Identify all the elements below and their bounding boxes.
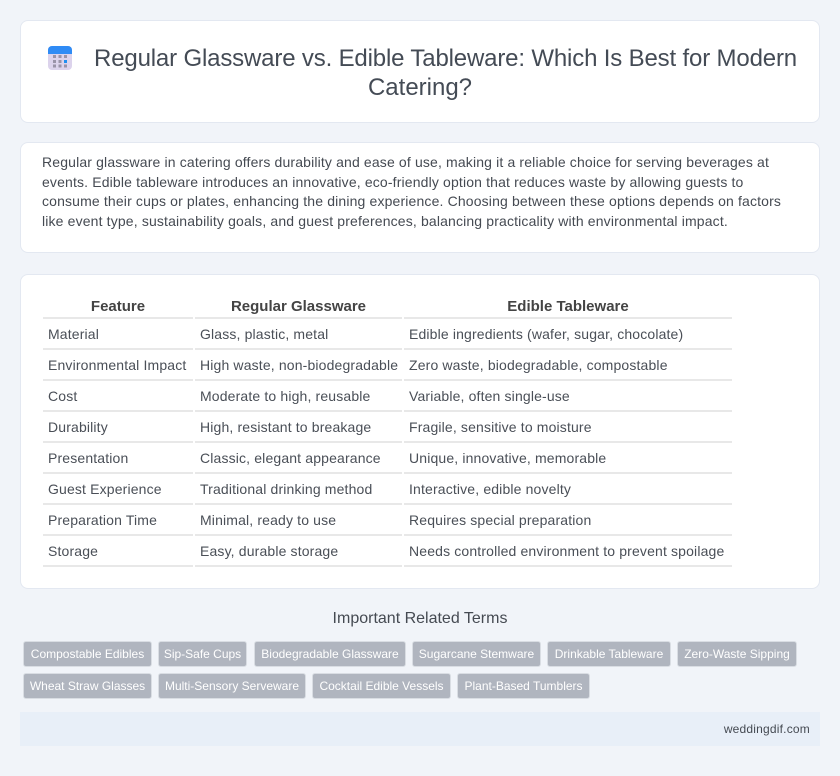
title [94, 45, 797, 101]
tags: related terms: Biodegradable Glassware [261, 647, 399, 661]
text block: introduction [42, 154, 781, 229]
tags: related terms: Sugarcane Stemware [419, 647, 534, 661]
comparison table: Material [48, 326, 99, 342]
tags: related terms: Compostable Edibles [31, 647, 144, 661]
comparison table: High, resistant to breakage [200, 419, 371, 435]
title: Regular Glassware vs. Edible Tableware: Which Is Best for Modern [94, 45, 797, 72]
heading: important related terms: Important Related Terms [333, 610, 507, 627]
tags: related terms: Plant-Based Tumblers [464, 679, 583, 693]
comparison table [43, 298, 732, 567]
tags: related terms: Multi-Sensory Serveware [165, 679, 299, 693]
comparison table: Preparation Time [48, 512, 157, 528]
text block: introduction: like event type, sustainability goals, and guest preferences, balancing practicality with environmental impact. [42, 213, 728, 229]
panel: header [20, 20, 820, 123]
comparison table: Glass, plastic, metal [200, 326, 328, 342]
title: Catering? [368, 74, 472, 101]
comparison table: Feature [91, 298, 145, 315]
comparison table: High waste, non-biodegradable [200, 357, 398, 373]
comparison table: Guest Experience [48, 481, 162, 497]
tags: related terms: Cocktail Edible Vessels [319, 679, 444, 693]
text block: introduction: Regular glassware in catering offers durability and ease of use, making it a reliable choice for serving beverages at [42, 154, 769, 170]
comparison table: Variable, often single-use [409, 388, 570, 404]
comparison table: Needs controlled environment to prevent spoilage [409, 543, 724, 559]
comparison table: Durability [48, 419, 108, 435]
tags: related terms: Zero-Waste Sipping [684, 647, 790, 661]
tags: related terms: Wheat Straw Glasses [30, 679, 145, 693]
comparison table: Easy, durable storage [200, 543, 338, 559]
comparison table: Minimal, ready to use [200, 512, 336, 528]
comparison table: Traditional drinking method [200, 481, 372, 497]
comparison table: Classic, elegant appearance [200, 450, 381, 466]
footer [20, 712, 820, 746]
comparison table: Edible Tableware [507, 298, 629, 315]
panel: comparison table [20, 274, 820, 589]
comparison table: Storage [48, 543, 98, 559]
tags: related terms: Drinkable Tableware [555, 647, 663, 661]
comparison table: Interactive, edible novelty [409, 481, 571, 497]
comparison table: Fragile, sensitive to moisture [409, 419, 592, 435]
tags: related terms [23, 641, 797, 699]
comparison table: Edible ingredients (wafer, sugar, chocolate) [409, 326, 683, 342]
comparison table: Unique, innovative, memorable [409, 450, 606, 466]
comparison table: Environmental Impact [48, 357, 186, 373]
comparison table: Zero waste, biodegradable, compostable [409, 357, 668, 373]
comparison table: Presentation [48, 450, 128, 466]
comparison table: Cost [48, 388, 77, 404]
footer: site name: weddingdif.com [724, 722, 810, 736]
panel: introduction [20, 142, 820, 253]
icon: calendar [48, 46, 72, 70]
tags: related terms: Sip-Safe Cups [164, 647, 241, 661]
comparison table: Requires special preparation [409, 512, 591, 528]
text block: introduction: consume their cups or plates, enhancing the dining experience. Choosing between these options depends on factors [42, 193, 781, 209]
comparison table: Moderate to high, reusable [200, 388, 370, 404]
comparison table: Regular Glassware [231, 298, 366, 315]
text block: introduction: events. Edible tableware introduces an innovative, eco-friendly option that reduces waste by allowing guests to [42, 174, 744, 190]
